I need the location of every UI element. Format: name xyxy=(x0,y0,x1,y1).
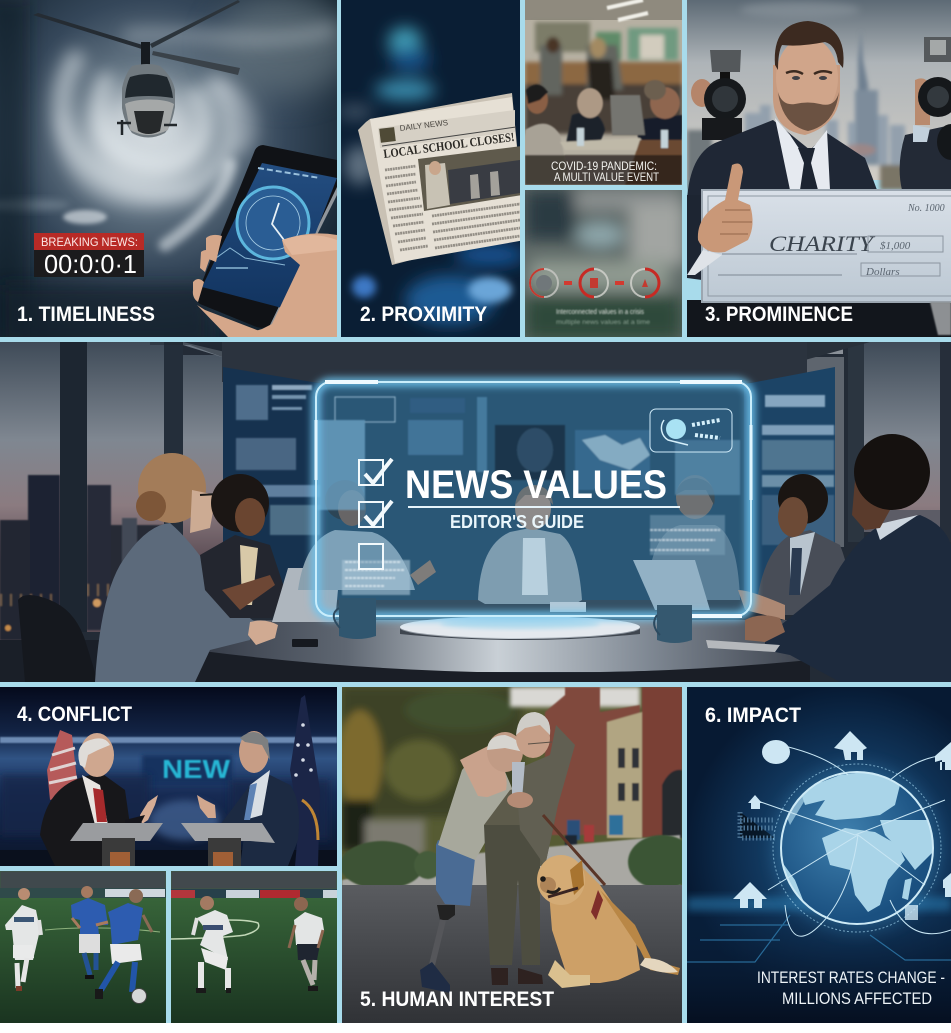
leash xyxy=(543,815,605,885)
caption: pandemic xyxy=(551,159,660,184)
sidewalk xyxy=(342,835,680,890)
panel: pandemic photo xyxy=(525,0,682,185)
panel: impact xyxy=(687,687,951,1023)
golden retriever xyxy=(537,855,680,988)
caption: blurred text: multiple news values at a time xyxy=(556,320,651,326)
person: woman at centre xyxy=(478,485,586,612)
checklist icons xyxy=(359,459,392,569)
caption: pandemic: COVID-19 PANDEMIC: xyxy=(551,159,657,173)
right photographer xyxy=(900,37,951,190)
panel: human interest xyxy=(342,687,682,1023)
podiums xyxy=(70,823,275,866)
windows with dusk skyline xyxy=(0,342,951,682)
newspaper xyxy=(358,93,525,265)
heading: timeliness: 1. TIMELINESS xyxy=(17,303,155,326)
heading: conflict: 4. CONFLICT xyxy=(17,703,132,726)
panel: conflict debate: NEW xyxy=(162,754,231,784)
icon: hand holding phone xyxy=(193,233,337,337)
globe xyxy=(773,764,941,932)
heading: prominence: 3. PROMINENCE xyxy=(705,303,853,326)
caption: blurred text xyxy=(556,309,651,326)
badge: breaking news countdown: BREAKING NEWS: xyxy=(41,235,138,249)
player with the ball xyxy=(95,889,152,1004)
network arcs xyxy=(755,745,951,936)
player in white xyxy=(193,896,233,993)
man with prosthetic leg xyxy=(420,732,524,993)
icon: helicopter xyxy=(33,0,240,138)
person: woman with hair bun xyxy=(18,453,278,682)
table xyxy=(195,616,850,682)
player in white xyxy=(5,888,41,991)
coffee mugs xyxy=(334,598,692,643)
panel: timeliness xyxy=(0,0,337,337)
debater right xyxy=(197,731,299,866)
panel: prominence xyxy=(687,0,951,337)
subtitle: EDITOR'S GUIDE xyxy=(450,512,584,532)
thumbs-up hand xyxy=(687,164,753,275)
heading: human interest: 5. HUMAN INTEREST xyxy=(360,988,554,1011)
newspaper: DAILY NEWS xyxy=(399,118,448,133)
person: man in navy suit, foreground xyxy=(706,434,951,682)
icon: smartphone with clock xyxy=(196,145,337,329)
panel: soccer left xyxy=(0,871,166,1023)
player in blue xyxy=(71,886,108,979)
caption: interest rates xyxy=(757,968,945,1008)
projected glass panel with title xyxy=(316,382,751,616)
oversized charity cheque: $1,000 xyxy=(880,240,911,252)
laptop xyxy=(272,568,340,622)
heading: proximity: 2. PROXIMITY xyxy=(360,303,487,326)
man in suit xyxy=(687,21,877,280)
person: presenter with glasses xyxy=(298,480,436,590)
older man in suit xyxy=(484,712,575,985)
person: woman with dark curly hair xyxy=(200,474,285,618)
oversized charity cheque xyxy=(702,190,951,302)
video wall xyxy=(222,342,835,600)
debater left xyxy=(40,733,158,866)
heading: impact: 6. IMPACT xyxy=(705,704,801,727)
oversized charity cheque: No. 1000 xyxy=(907,203,945,214)
title: NEWS VALUES xyxy=(405,463,667,507)
person: man in grey suit xyxy=(738,474,852,620)
caption: interest rates: MILLIONS AFFECTED xyxy=(782,989,932,1008)
player in white and black xyxy=(289,897,324,991)
badge: breaking news countdown xyxy=(34,233,144,279)
icon: houses xyxy=(733,731,951,920)
oversized charity cheque: Dollars xyxy=(865,266,900,278)
panel: conflict debate xyxy=(0,687,337,866)
oversized charity cheque: CHARITY xyxy=(769,231,876,256)
panel: blurred data graphic xyxy=(525,190,682,337)
panel: proximity xyxy=(341,0,520,337)
search graphic xyxy=(650,409,732,452)
caption: pandemic: A MULTI VALUE EVENT xyxy=(554,170,660,184)
panel: newsroom hero xyxy=(0,342,951,682)
caption: blurred text: Interconnected values in a crisis xyxy=(556,309,644,316)
person: woman at right of glass xyxy=(633,475,740,610)
american flags xyxy=(47,695,320,866)
icon row: circular gauges xyxy=(530,269,659,297)
badge: breaking news countdown: 00:0:0·1 xyxy=(44,249,137,279)
panel: soccer right xyxy=(171,871,337,1023)
hedges xyxy=(340,835,696,889)
left camera xyxy=(691,50,746,140)
